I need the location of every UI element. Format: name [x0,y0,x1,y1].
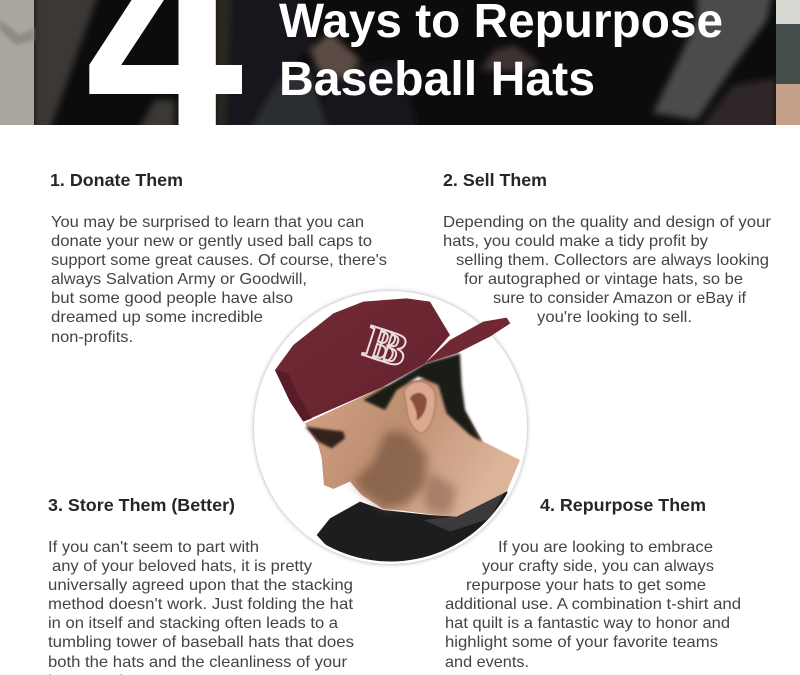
body text: Donate Them: always Salvation Army or Goodwill, [51,271,307,288]
body text: Repurpose Them: repurpose your hats to get some [466,577,706,594]
beard [353,432,427,509]
body text: Repurpose Them: and events. [445,654,529,671]
title [279,0,723,106]
heading: Donate Them: 1. Donate Them [50,170,183,190]
cap logo: B [358,315,404,374]
body text: Donate Them [51,214,387,346]
body text: Repurpose Them: If you are looking to embrace [498,539,713,556]
body text: Store Them: any of your beloved hats, it is pretty [52,558,312,575]
body text: Sell Them: Depending on the quality and design of your [443,214,772,231]
body text: Store Them: tumbling tower of baseball hats that does [48,634,354,651]
body text: Store Them: in on itself and stacking often leads to a [48,615,338,632]
section 4: Repurpose Them [445,495,741,671]
eye shadow [305,427,345,448]
neck and face [305,372,520,517]
body text: Donate Them: support some great causes. Of course, there's [51,252,387,269]
ear [404,382,435,433]
body text: Donate Them: non-profits. [51,329,133,346]
header banner photo [0,0,800,135]
heading: Repurpose Them: 4. Repurpose Them [540,495,706,515]
body text: Donate Them: dreamed up some incredible [51,309,263,326]
body text: Repurpose Them: your crafty side, you can always [482,558,714,575]
body text: Store Them: both the hats and the cleanliness of your [48,654,348,671]
body text: Store Them: method doesn't work. Just folding the hat [48,596,354,613]
side strips of the photo [0,0,800,125]
body text: Store Them [48,539,354,675]
title: Baseball Hats [279,53,595,106]
body text: Donate Them: donate your new or gently used ball caps to [51,233,372,250]
heading: Sell Them: 2. Sell Them [443,170,547,190]
body text: Sell Them: you're looking to sell. [537,309,692,326]
shirt [316,491,508,562]
body text: Repurpose Them [445,539,741,671]
body text: Store Them: If you can't seem to part with [48,539,259,556]
cap logo: B [368,319,414,378]
section 3: Store Them (Better) [48,495,354,675]
body text: Sell Them: selling them. Collectors are always looking [456,252,769,269]
body text: Donate Them: You may be surprised to learn that you can [51,214,364,231]
section 2: Sell Them [443,170,772,326]
body text: Repurpose Them: hat quilt is a fantastic way to honor and [445,615,730,632]
body text: Sell Them: for autographed or vintage hats, so be [464,271,743,288]
hair [363,353,482,442]
body text: Repurpose Them: additional use. A combination t-shirt and [445,596,741,613]
circular portrait [252,290,528,572]
body text: Sell Them [443,214,772,326]
body text: Sell Them: sure to consider Amazon or eBay if [493,290,747,307]
body text: Repurpose Them: highlight some of your favorite teams [445,634,718,651]
cap crown [275,298,450,422]
section 1: Donate Them [50,170,387,346]
cap brim [425,318,510,363]
heading: Store Them (Better): 3. Store Them (Better) [48,495,235,515]
baseball cap [275,298,510,422]
body text: Store Them: universally agreed upon that the stacking [48,577,353,594]
body text: Sell Them: hats, you could make a tidy profit by [443,233,708,250]
body text: Donate Them: but some good people have also [51,290,293,307]
